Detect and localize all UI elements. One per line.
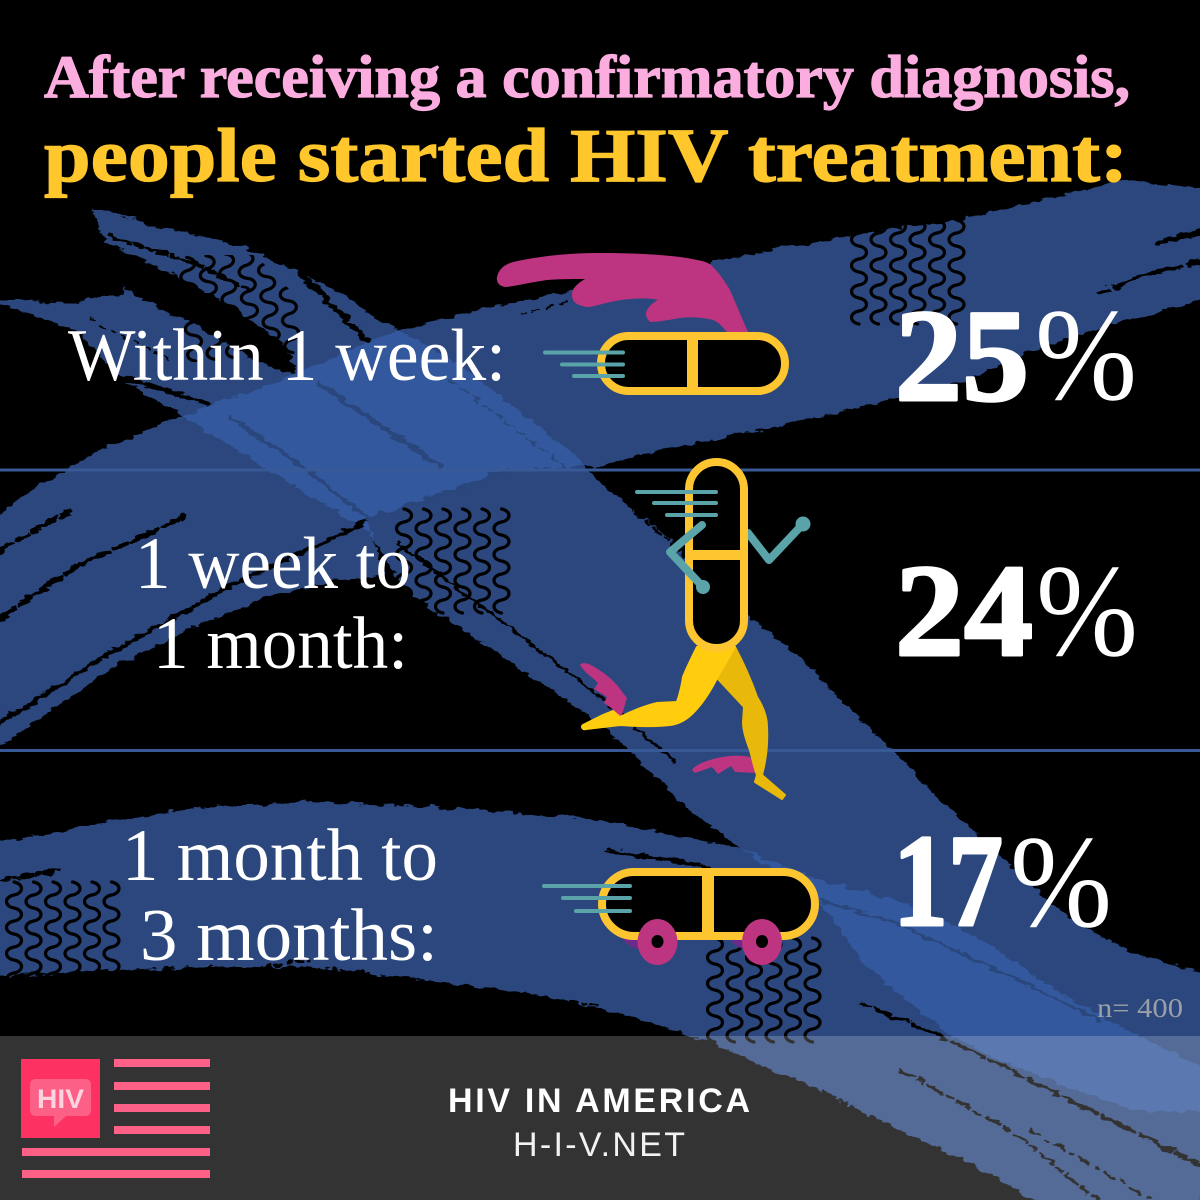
row 2 label: 1 week to: [135, 523, 411, 605]
wavy pattern: top right: [852, 220, 964, 324]
footer url: H-I-V.NET: [513, 1126, 685, 1164]
black gaps in the top-left bristles: [103, 240, 297, 374]
brush stroke: descending: [0, 207, 1200, 1113]
row 1 value: 25: [895, 282, 1029, 429]
row 1 value: %: [1035, 281, 1137, 428]
row 2 icon: running pill: [580, 462, 810, 799]
row 1 icon: winged pill: [497, 253, 785, 391]
row 3 label: 1 month to: [122, 815, 438, 897]
wavy pattern: under skateboard pill: [708, 938, 820, 1042]
footer heading: HIV IN AMERICA: [448, 1082, 750, 1120]
title line 1: After receiving a confirmatory diagnosis,: [44, 44, 1130, 110]
row 2 label: [135, 523, 411, 685]
row 3 value: [893, 807, 1112, 955]
title line 2: people started HIV treatment:: [44, 114, 1128, 198]
brush stroke: lower: [0, 802, 1200, 1200]
row 3 icon: pill on wheels: [544, 872, 815, 965]
row 2 value: %: [1036, 537, 1138, 684]
footer band: [0, 1036, 1200, 1200]
logo: HIV flag: [21, 1059, 210, 1178]
row 3 label: 3 months:: [140, 895, 438, 977]
row 3 value: %: [1010, 808, 1112, 955]
row 1 value: [895, 281, 1137, 429]
wavy pattern: upper left: [179, 248, 300, 362]
row 2 value: [895, 537, 1138, 684]
row 2 value: 24: [895, 537, 1033, 684]
title: [44, 44, 1130, 198]
sample size note: n= 400: [1097, 993, 1183, 1023]
wavy pattern: middle: [396, 509, 509, 613]
row 1 label: Within 1 week:: [68, 315, 506, 397]
row 3 label: [122, 815, 438, 977]
row 2 label: 1 month:: [153, 603, 408, 685]
row 3 value: 17: [893, 807, 1003, 954]
divider lines: [0, 468, 1200, 752]
brush stroke: rising: [0, 180, 1200, 756]
logo: HIV flag: HIV: [37, 1084, 84, 1114]
wavy pattern: lower left: [6, 882, 119, 986]
